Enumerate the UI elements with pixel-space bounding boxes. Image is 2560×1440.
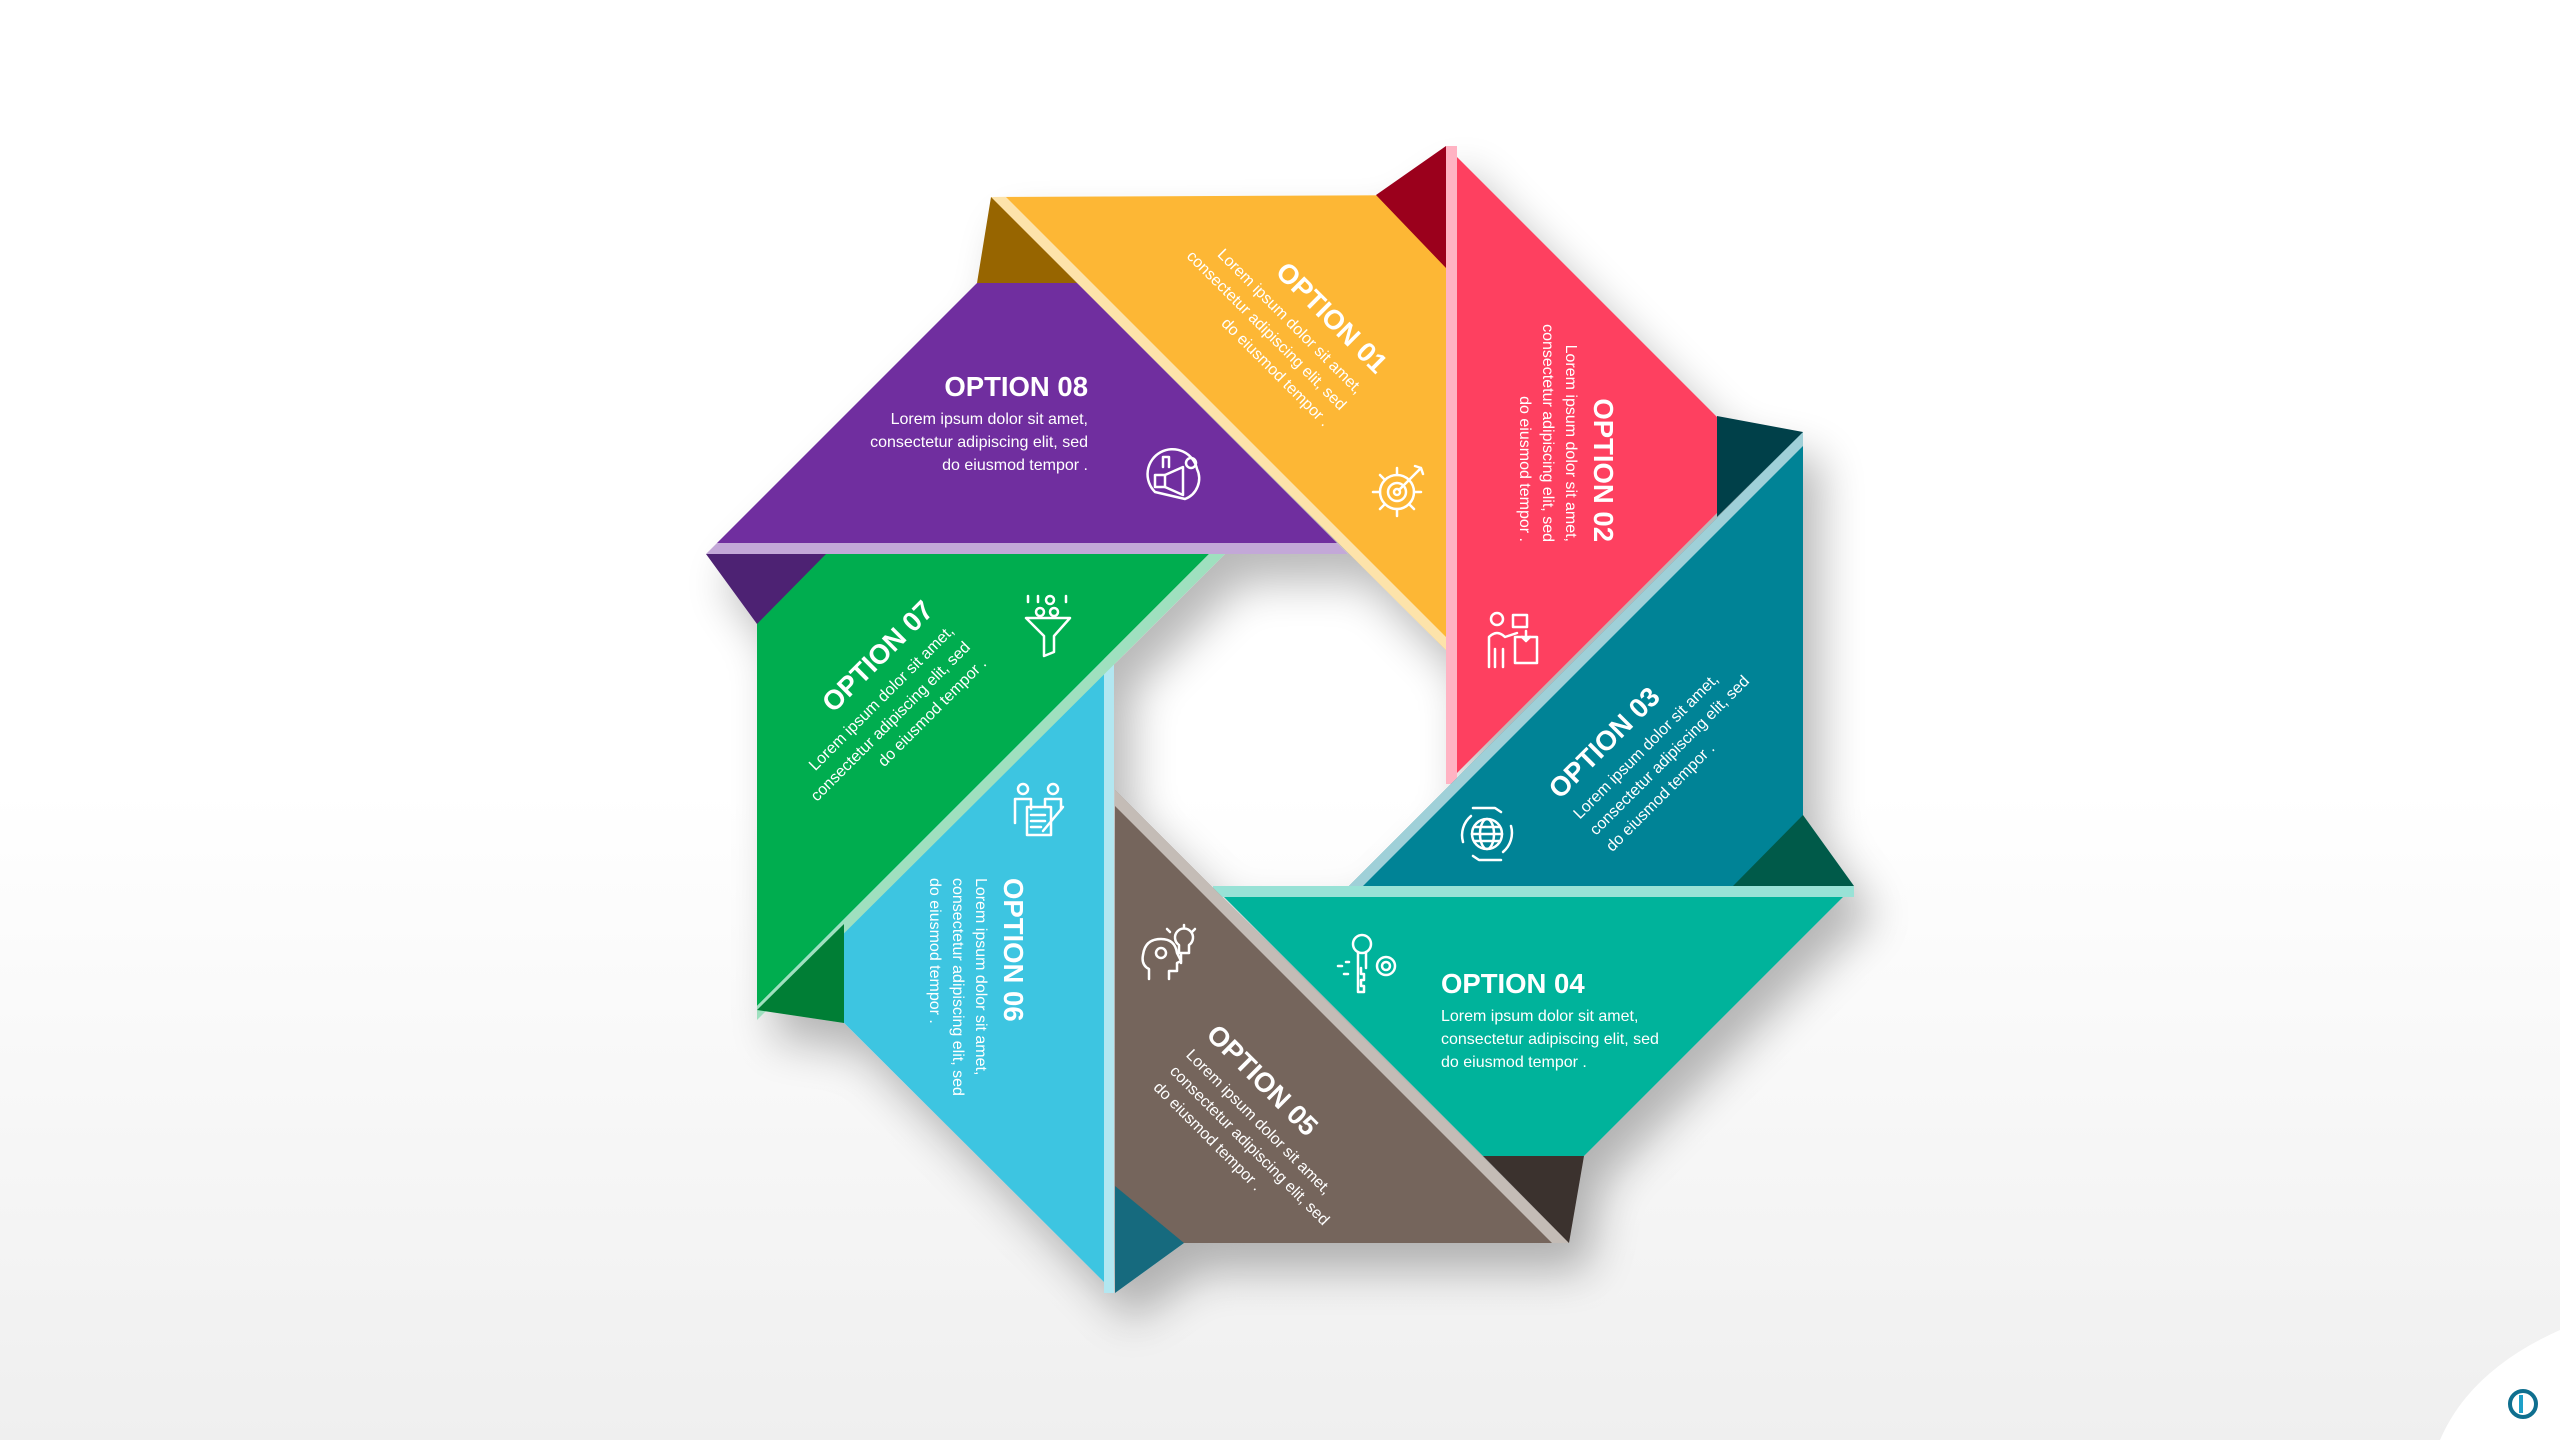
icon: person puzzle (02) [1489, 613, 1537, 667]
panel: option 01 yellow [991, 195, 1446, 650]
text: option 06: do eiusmod tempor . [926, 878, 943, 1024]
text: option 07: do eiusmod tempor . [875, 655, 990, 770]
icon: globe hands (03) [1462, 808, 1512, 860]
text: option 04: Lorem ipsum dolor sit amet, [1441, 1008, 1638, 1025]
fold: deep teal [1115, 1186, 1184, 1293]
text: option 07 [763, 594, 990, 821]
fold: dark teal [1717, 416, 1803, 517]
fold: dark green [1733, 815, 1854, 886]
text: option 05: OPTION 05 [1201, 1018, 1324, 1142]
icon: key gear (04) [1338, 935, 1395, 992]
text: option 06: consectetur adipiscing elit, sed [949, 878, 966, 1096]
text: option 02 [1516, 324, 1619, 542]
text: option 03 [1542, 628, 1769, 855]
pinwheel diagram [706, 146, 1854, 1293]
text: option 06 [926, 878, 1029, 1096]
fold: brown [977, 197, 1077, 283]
panel: option 02 red [1446, 146, 1765, 784]
text: option 01: consectetur adipiscing elit, sed [1183, 248, 1349, 414]
text: option 07: consectetur adipiscing elit, sed [808, 639, 974, 805]
text: option 02: do eiusmod tempor . [1516, 396, 1533, 542]
text: option 01: OPTION 01 [1270, 256, 1394, 379]
text: option 08: OPTION 08 [944, 371, 1088, 402]
panel: option 03 teal [1349, 432, 1803, 886]
text: option 05: do eiusmod tempor . [1150, 1079, 1265, 1194]
logo [2510, 1391, 2536, 1417]
text: option 05 [1150, 1018, 1377, 1245]
icon: funnel (07) [1026, 596, 1070, 656]
panel: option 06 light blue [789, 653, 1114, 1293]
text: option 06: OPTION 06 [998, 878, 1029, 1022]
text: option 01: do eiusmod tempor . [1218, 315, 1333, 430]
text: option 02: OPTION 02 [1588, 398, 1619, 542]
icon: head bulb (05) [1143, 925, 1195, 979]
text: option 04 [1441, 968, 1659, 1071]
icon: gear target (01) [1373, 466, 1423, 516]
fold: dark brown [1483, 1156, 1584, 1243]
corner decoration [2440, 1330, 2560, 1440]
strip: lavender [706, 543, 1348, 554]
text: option 07: OPTION 07 [816, 594, 939, 718]
text: option 08: do eiusmod tempor . [942, 457, 1088, 474]
text: option 03: OPTION 03 [1542, 681, 1666, 804]
fold: dark purple [706, 554, 826, 624]
text: option 08: Lorem ipsum dolor sit amet, [891, 411, 1088, 428]
text: option 08: consectetur adipiscing elit, sed [870, 434, 1088, 451]
icon: people document (06) [1015, 784, 1063, 835]
text: option 03: Lorem ipsum dolor sit amet, [1571, 671, 1722, 823]
text: option 05: consectetur adipiscing elit, sed [1166, 1063, 1332, 1229]
panel: option 07 green [757, 554, 1225, 1020]
text: option 04: consectetur adipiscing elit, sed [1441, 1031, 1659, 1048]
text: option 04: do eiusmod tempor . [1441, 1054, 1587, 1071]
panel: option 05 brown [1115, 790, 1569, 1243]
icon: megaphone social (08) [1148, 449, 1199, 499]
text: option 04: OPTION 04 [1441, 968, 1585, 999]
text: option 08 [870, 371, 1088, 474]
text: option 03: consectetur adipiscing elit, sed [1587, 673, 1753, 839]
text: option 02: Lorem ipsum dolor sit amet, [1562, 345, 1579, 542]
text: option 03: do eiusmod tempor . [1603, 740, 1718, 855]
panel: option 08 purple [717, 283, 1337, 543]
panel: option 04 green-teal [1213, 886, 1854, 1156]
text: option 01 [1167, 203, 1394, 430]
text: option 02: consectetur adipiscing elit, sed [1539, 324, 1556, 542]
fold: dark green 07 [757, 924, 844, 1023]
text: option 07: Lorem ipsum dolor sit amet, [806, 623, 958, 774]
text: option 01: Lorem ipsum dolor sit amet, [1214, 246, 1365, 398]
text: option 06: Lorem ipsum dolor sit amet, [972, 878, 989, 1075]
text: option 05: Lorem ipsum dolor sit amet, [1182, 1047, 1334, 1198]
fold: dark red [1376, 146, 1446, 268]
